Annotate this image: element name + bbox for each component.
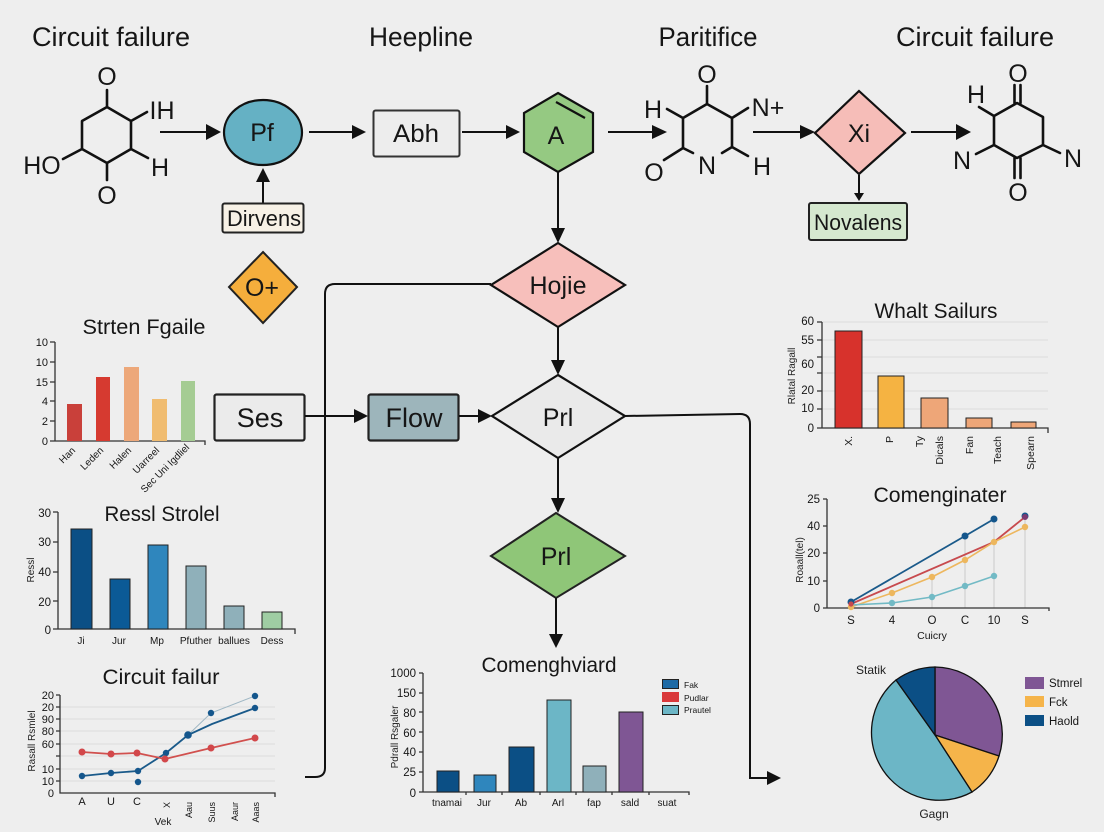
chart: Circuit failur line chart: 10	[42, 776, 54, 788]
arrow: Abh to A	[462, 125, 520, 139]
node: Prl grey diamond: Prl	[543, 404, 573, 432]
chart: Strten Fgaile bar chart: 15	[36, 377, 48, 389]
chart: Whalt Sailurs bar chart: Fan	[964, 436, 976, 454]
chart: Strten Fgaile bar chart: Leden	[79, 445, 106, 473]
icon: molecule three: O	[1008, 179, 1028, 207]
chart: Ressl Strolel bar chart	[26, 503, 295, 647]
chart: Circuit failur line chart: Rasall Rsmlel	[27, 710, 38, 772]
chart: Ressl Strolel bar chart: 0	[45, 625, 51, 637]
chart: Ressl Strolel bar chart: Dess	[261, 636, 283, 647]
chart: Circuit failur line chart: Aaas	[251, 802, 261, 823]
legend: Prautel	[684, 705, 711, 715]
chart: Strten Fgaile bar chart: Uarreel	[131, 445, 162, 476]
chart title: Ressl Strolel	[104, 503, 220, 526]
chart: Whalt Sailurs bar chart	[787, 300, 1048, 470]
chart: Circuit failur line chart: C	[133, 796, 141, 808]
chart: Whalt Sailurs bar chart: Ty	[914, 435, 926, 447]
chart: Circuit failur line chart: 20	[42, 702, 54, 714]
chart: Comenghviard bar chart with legend: Pdrall Rsgaler	[390, 705, 401, 768]
chart: Comenghviard bar chart with legend: 60	[403, 728, 416, 740]
node: Xi diamond	[815, 91, 905, 174]
title: paritifice: Paritifice	[658, 22, 758, 52]
icon: molecule two: O	[644, 159, 664, 187]
icon: molecule three: N	[1064, 145, 1082, 173]
chart: Comenginater line chart: S	[847, 615, 855, 627]
node: Pf ellipse: Pf	[250, 119, 274, 147]
node: O+ diamond: O+	[245, 274, 279, 302]
chart: Ressl Strolel bar chart: Ressl	[26, 557, 37, 583]
chart: Strten Fgaile bar chart: 4	[42, 396, 48, 408]
arrow: Xi to molecule three	[911, 124, 971, 140]
node: O+ diamond	[229, 252, 297, 323]
chart: Whalt Sailurs bar chart: P	[884, 436, 896, 443]
legend: Fak	[684, 680, 699, 690]
chart: Comenghviard bar chart with legend: 25	[403, 767, 416, 779]
chart: Comenghviard bar chart with legend: suat	[658, 798, 677, 809]
legend	[662, 680, 711, 715]
chart: Comenghviard bar chart with legend: Arl	[552, 798, 564, 809]
node: Prl green diamond	[491, 513, 625, 598]
chart title: Comenghviard	[482, 654, 616, 677]
chart: Circuit failur line chart: 10	[42, 764, 54, 776]
chart: Circuit failur line chart: Aau	[184, 802, 194, 818]
icon: molecule one	[23, 63, 174, 210]
icon: molecule two	[644, 61, 784, 187]
chart: Comenghviard bar chart with legend: fap	[587, 798, 601, 809]
chart: Comenginater line chart: 10	[807, 576, 820, 588]
chart: Ressl Strolel bar chart: 30	[38, 537, 51, 549]
chart: Circuit failur line chart: Aaur	[230, 802, 240, 821]
chart: Circuit failur line chart: 20	[42, 690, 54, 702]
chart: Circuit failur line chart	[27, 666, 275, 828]
chart: Ressl Strolel bar chart: ballues	[218, 636, 250, 647]
chart: Comenghviard bar chart with legend: Ab	[515, 798, 528, 809]
chart: Circuit failur line chart: 60	[42, 739, 54, 751]
arrow: A to molecule two	[608, 125, 667, 139]
icon: molecule two: H	[753, 153, 771, 181]
pie label: Gagn: Gagn	[919, 807, 949, 821]
chart: Comenginater line chart: 40	[807, 521, 820, 533]
chart: Circuit failur line chart: A	[78, 796, 86, 808]
chart: Strten Fgaile bar chart: 10	[36, 337, 48, 349]
chart: Comenginater line chart: 20	[807, 548, 820, 560]
title: circuit failure right: Circuit failure	[896, 22, 1054, 52]
chart: Whalt Sailurs bar chart: Rlatal Ragall	[787, 348, 798, 404]
arrow: molecule to Pf	[160, 124, 221, 140]
chart: Ressl Strolel bar chart: Ji	[77, 636, 85, 647]
chart: Whalt Sailurs bar chart: Spearn	[1025, 436, 1037, 470]
node: Flow box: Flow	[385, 403, 443, 433]
chart: Circuit failur line chart: 0	[48, 788, 54, 800]
chart: Strten Fgaile bar chart	[36, 316, 206, 495]
arrow: A to Hojie	[551, 172, 565, 243]
chart: Comenghviard bar chart with legend: Jur	[477, 798, 492, 809]
chart: Strten Fgaile bar chart: 2	[42, 416, 48, 428]
node: Xi diamond: Xi	[848, 120, 870, 148]
chart: Ressl Strolel bar chart: 40	[38, 567, 51, 579]
legend: Stmrel	[1049, 678, 1082, 690]
legend: Pudlar	[684, 693, 709, 703]
arrow: Dirvens to Pf	[256, 168, 270, 203]
node: Pf ellipse	[224, 100, 302, 165]
node: Novalens box	[809, 203, 907, 240]
node: Ses box: Ses	[237, 403, 283, 433]
chart: Comenginater line chart: Cuicry	[917, 630, 948, 642]
arrow: Flow to Prl	[459, 409, 492, 423]
chart: Whalt Sailurs bar chart: X.	[843, 436, 855, 446]
chart: Comenghviard bar chart with legend: 1000	[390, 668, 416, 680]
icon: molecule three: O	[1008, 60, 1028, 88]
chart: Comenginater line chart: O	[928, 615, 937, 627]
chart: Strten Fgaile bar chart: 10	[36, 357, 48, 369]
chart: Comenginater line chart: 25	[807, 494, 820, 506]
title: circuit failure left: Circuit failure	[32, 22, 190, 52]
icon: molecule two: O	[697, 61, 717, 89]
node: Abh box: Abh	[393, 120, 439, 148]
icon: molecule two: N	[698, 152, 716, 180]
connector: Hojie down left to bottom	[305, 284, 491, 777]
chart title: Strten Fgaile	[82, 316, 206, 339]
arrow: green Prl to bar chart	[549, 598, 563, 648]
node: Prl green diamond: Prl	[541, 543, 571, 571]
chart: Whalt Sailurs bar chart: Teach	[992, 436, 1004, 464]
icon: molecule two: H	[644, 96, 662, 124]
arrow: Prl right to pie	[625, 414, 781, 785]
icon: molecule one: IH	[150, 97, 174, 125]
chart: Circuit failur line chart: U	[107, 796, 115, 808]
node: Flow box	[368, 394, 458, 440]
chart: Ressl Strolel bar chart: Jur	[112, 636, 127, 647]
chart: Comenginater line chart: S	[1021, 615, 1029, 627]
icon: molecule three: H	[967, 81, 985, 109]
chart: Comenghviard bar chart with legend: 0	[410, 788, 416, 800]
arrow: Prl to green Prl	[551, 458, 565, 513]
chart: Ressl Strolel bar chart: 20	[38, 597, 51, 609]
title: heepline: Heepline	[369, 22, 473, 52]
chart: Ressl Strolel bar chart: 30	[38, 508, 51, 520]
node: Hojie diamond: Hojie	[530, 272, 586, 300]
chart: Comenginater line chart: Roaall(tel)	[795, 537, 806, 583]
arrow: Ses to Flow	[305, 409, 368, 423]
node: A hexagon: A	[548, 122, 565, 150]
chart: Whalt Sailurs bar chart: 20	[801, 385, 814, 397]
chart title: Comenginater	[874, 484, 1007, 507]
chart: Strten Fgaile bar chart: 0	[42, 436, 48, 448]
icon: molecule three: N	[953, 147, 971, 175]
chart: Whalt Sailurs bar chart: 10	[801, 403, 814, 415]
legend: Haold	[1049, 716, 1079, 728]
chart: Comenginater line chart: 4	[889, 615, 896, 627]
chart: Comenghviard bar chart with legend: tnamai	[432, 798, 462, 809]
chart: Comenginater line chart: C	[961, 615, 969, 627]
chart: Whalt Sailurs bar chart: 0	[808, 423, 814, 435]
icon: molecule one: O	[97, 63, 117, 91]
chart: Comenginater line chart: 10	[988, 615, 1000, 627]
node: Prl grey diamond	[492, 375, 625, 458]
legend	[1025, 677, 1082, 728]
chart: pie chart with legend	[856, 663, 1082, 821]
icon: molecule one: HO	[23, 152, 61, 180]
chart: Circuit failur line chart: 80	[42, 726, 54, 738]
chart: Ressl Strolel bar chart: Mp	[150, 636, 164, 647]
chart: Comenghviard bar chart with legend: 80	[403, 708, 416, 720]
node: Ses box	[214, 394, 304, 440]
chart: Circuit failur line chart: X	[162, 802, 172, 808]
chart title: Circuit failur	[102, 666, 220, 689]
chart: Circuit failur line chart: 90	[42, 714, 54, 726]
node: Novalens box: Novalens	[814, 210, 902, 235]
node: Hojie diamond	[491, 243, 625, 327]
chart: Ressl Strolel bar chart: Pfuther	[180, 636, 213, 647]
arrow: Xi to Novalens	[854, 175, 864, 201]
node: Dirvens box: Dirvens	[227, 206, 301, 231]
chart: Comenghviard bar chart with legend: 40	[403, 747, 416, 759]
chart: Circuit failur line chart: Vek	[155, 817, 172, 828]
icon: molecule one: H	[151, 154, 169, 182]
icon: molecule three	[953, 60, 1082, 207]
chart: Strten Fgaile bar chart: Sec Uni Igdliel	[139, 442, 192, 495]
arrow: Pf to Abh	[309, 125, 366, 139]
chart: Strten Fgaile bar chart: Han	[57, 445, 78, 466]
chart: Circuit failur line chart: Suus	[207, 802, 217, 823]
node: A hexagon	[524, 93, 593, 172]
icon: molecule one: O	[97, 182, 117, 210]
chart: Whalt Sailurs bar chart: 60	[801, 316, 814, 328]
arrow: molecule two to Xi	[753, 125, 815, 139]
chart: Whalt Sailurs bar chart: 55	[801, 335, 814, 347]
chart: Whalt Sailurs bar chart: Dicals	[934, 436, 946, 465]
chart: Comenginater line chart: 0	[814, 603, 820, 615]
icon: molecule two: N+	[752, 94, 784, 122]
chart: Comenghviard bar chart with legend: sald	[621, 798, 639, 809]
chart: Comenginater line chart	[795, 484, 1049, 642]
pie label: Statik: Statik	[856, 663, 887, 677]
chart: Strten Fgaile bar chart: Halen	[108, 445, 134, 472]
arrow: Hojie to Prl	[551, 327, 565, 375]
chart: Comenghviard bar chart with legend: 150	[397, 688, 416, 700]
chart title: Whalt Sailurs	[874, 300, 998, 323]
legend: Fck	[1049, 697, 1068, 709]
chart: Whalt Sailurs bar chart: 60	[801, 359, 814, 371]
node: Abh box	[374, 110, 460, 156]
chart: Comenghviard bar chart with legend	[390, 654, 711, 809]
